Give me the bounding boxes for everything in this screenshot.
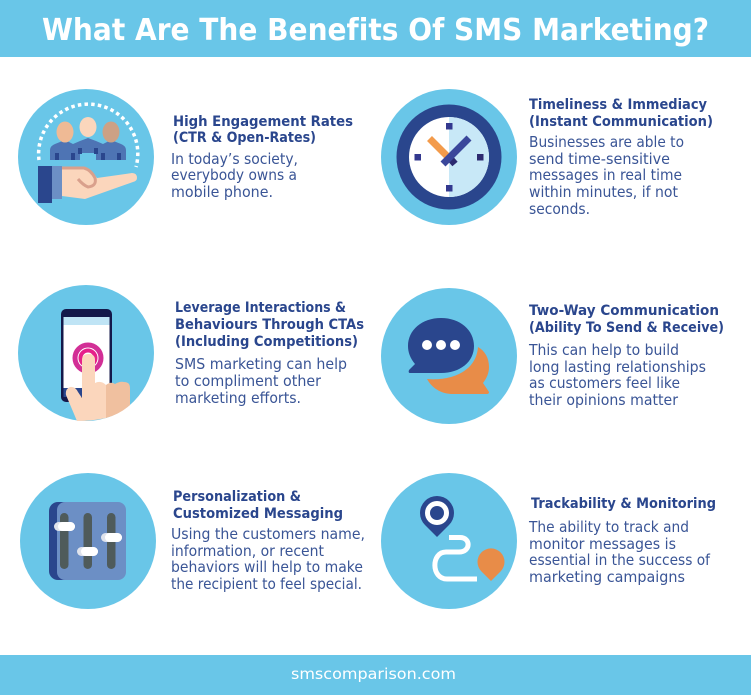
text: timeliness body <box>529 133 684 218</box>
heading: personalization: Personalization & <box>173 489 301 505</box>
text: personalization body: behaviors will help to make <box>171 558 363 576</box>
heading: high engagement rates: High Engagement Rates <box>173 114 353 130</box>
text: two-way body: This can help to build <box>528 341 679 359</box>
text: personalization body <box>171 525 365 593</box>
icon: route with map pins <box>381 473 517 609</box>
heading: high engagement rates: (CTR & Open-Rates) <box>173 130 316 146</box>
header banner <box>0 0 751 57</box>
text: high engagement body: everybody owns a <box>171 166 297 184</box>
panel: leverage interactions <box>18 285 364 421</box>
icon: sliders <box>20 473 156 609</box>
heading: leverage interactions <box>175 300 364 350</box>
text: two-way body: as customers feel like <box>529 374 680 392</box>
heading: two-way communication <box>529 303 724 336</box>
text: timeliness body: send time-sensitive <box>529 150 670 168</box>
text: trackability body: marketing campaigns <box>529 568 685 586</box>
icon: clock <box>381 89 517 225</box>
text: personalization body: Using the customers name, <box>171 525 365 543</box>
footer banner: smscomparison.com <box>291 665 456 683</box>
heading: high engagement rates <box>173 114 353 146</box>
heading: leverage interactions: Behaviours Through CTAs <box>175 317 364 333</box>
heading: two-way communication: Two-Way Communication <box>529 303 719 319</box>
text: leverage body <box>175 355 347 407</box>
icon: phone with tapping hand <box>18 285 154 421</box>
text: personalization body: information, or recent <box>171 542 324 560</box>
heading: timeliness: (Instant Communication) <box>529 114 713 130</box>
text: two-way body: their opinions matter <box>529 391 679 409</box>
text: timeliness body: seconds. <box>529 200 590 218</box>
heading: personalization <box>173 489 343 522</box>
icon: speech bubbles <box>381 288 517 424</box>
text: trackability body: The ability to track and <box>528 518 689 536</box>
heading: personalization: Customized Messaging <box>173 506 343 522</box>
panel: high engagement rates <box>18 89 353 225</box>
heading: leverage interactions: (Including Competitions) <box>175 334 358 350</box>
panel: trackability <box>381 473 716 609</box>
text: timeliness body: Businesses are able to <box>529 133 684 151</box>
header banner: What Are The Benefits Of SMS Marketing? <box>42 13 709 48</box>
text: leverage body: SMS marketing can help <box>175 355 347 373</box>
heading: leverage interactions: Leverage Interactions & <box>175 300 346 316</box>
heading: timeliness: Timeliness & Immediacy <box>529 97 707 113</box>
text: high engagement body: In today’s society, <box>171 150 298 168</box>
panel: personalization <box>20 473 365 609</box>
text: timeliness body: messages in real time <box>529 166 682 184</box>
heading: two-way communication: (Ability To Send & Receive) <box>529 320 724 336</box>
text: two-way body <box>528 341 706 409</box>
text: trackability body: monitor messages is <box>529 535 676 553</box>
text: high engagement body <box>171 150 298 201</box>
panel: timeliness and immediacy <box>381 89 713 225</box>
text: trackability body <box>528 518 711 586</box>
panel: two-way communication <box>381 288 724 424</box>
icon: hand holding people <box>18 89 154 225</box>
text: leverage body: to compliment other <box>175 372 322 390</box>
text: personalization body: the recipient to feel special. <box>171 575 362 593</box>
heading: timeliness <box>529 97 713 130</box>
text: two-way body: long lasting relationships <box>529 358 706 376</box>
text: leverage body: marketing efforts. <box>175 389 301 407</box>
text: timeliness body: within minutes, if not <box>529 183 678 201</box>
text: trackability body: essential in the success of <box>529 551 711 569</box>
heading: trackability: Trackability & Monitoring <box>531 496 716 512</box>
footer banner <box>0 655 751 695</box>
text: high engagement body: mobile phone. <box>171 183 273 201</box>
